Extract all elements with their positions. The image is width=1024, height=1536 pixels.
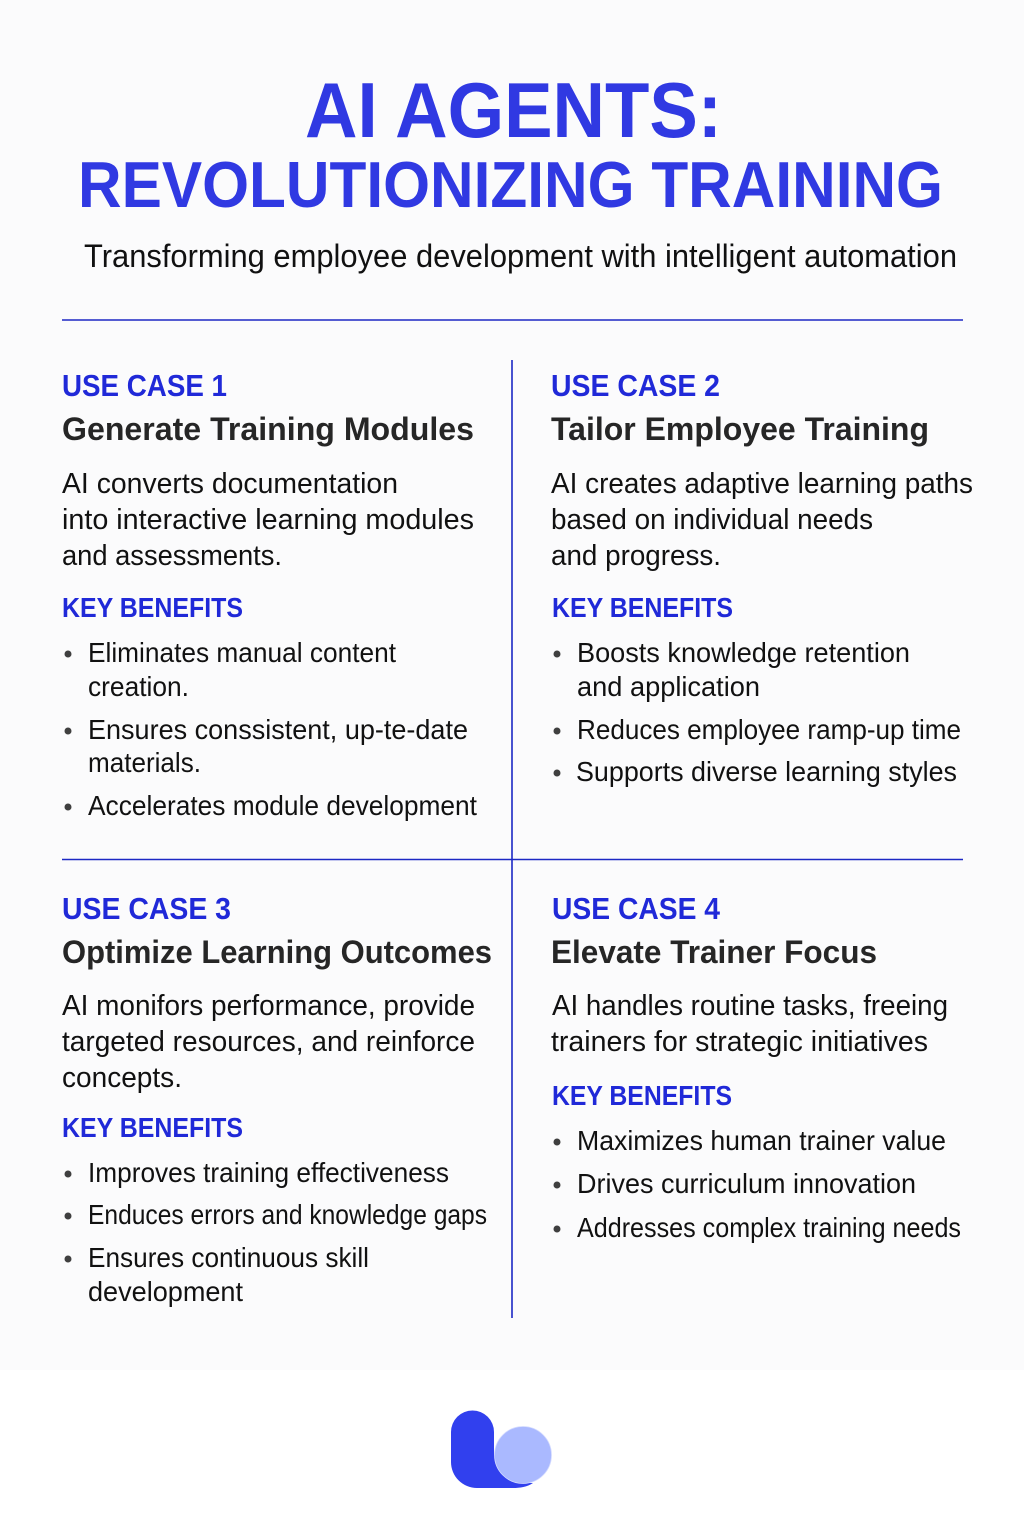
use case 4 description: trainers for strategic initiatives [551,1026,928,1058]
use case 1 benefits list: Ensures conssistent, up-te-date [88,714,468,745]
use case 2 benefits list: Boosts knowledge retention [577,637,910,668]
use case 3 label: USE CASE 3 [62,891,231,926]
use case 4 description: AI handles routine tasks, freeing [552,990,948,1022]
use case 3 description: targeted resources, and reinforce [62,1026,475,1058]
use case 2 benefits list [554,637,961,787]
use case 2 description: and progress. [551,540,721,572]
use case 3 key benefits heading: KEY BENEFITS [62,1112,243,1143]
header [78,66,957,274]
use case 3 heading: Optimize Learning Outcomes [62,934,492,970]
use case 2 key benefits heading: KEY BENEFITS [552,592,733,623]
use case 4 benefits list: Addresses complex training needs [577,1212,961,1243]
title line 1: AI AGENTS: [305,66,722,154]
use case 2 description [551,468,973,572]
use case 4 label: USE CASE 4 [552,891,721,926]
use case 1 description: AI converts documentation [62,468,398,500]
use case 1 description [62,468,474,572]
use case 3 description: concepts. [62,1062,182,1094]
use case 2 description: based on individual needs [551,504,873,536]
use case 4 description [551,990,948,1058]
use case 1 benefits list: creation. [88,671,189,702]
subtitle: Transforming employee development with intelligent automation [84,238,957,274]
panel: use case 4 [551,891,961,1243]
use case 1 benefits list [64,637,477,821]
use case 1 benefits list: Eliminates manual content [88,637,396,668]
use case 1 benefits list: Accelerates module development [88,790,477,821]
panel: use case 3 [62,891,492,1307]
use case 2 benefits list: Supports diverse learning styles [576,756,957,787]
use case 3 benefits list: Improves training effectiveness [88,1157,449,1188]
use case 3 benefits list: Ensures continuous skill [88,1242,369,1273]
use case 4 benefits list: Maximizes human trainer value [577,1125,946,1156]
use case 3 benefits list: development [88,1276,243,1307]
use case 3 description [62,990,475,1094]
use case 4 heading: Elevate Trainer Focus [551,934,877,970]
use case 3 benefits list: Enduces errors and knowledge gaps [88,1199,487,1230]
use case 1 description: and assessments. [62,540,282,572]
use case 4 key benefits heading: KEY BENEFITS [552,1080,732,1111]
use case 3 benefits list [64,1157,487,1307]
use case 1 benefits list: materials. [88,747,201,778]
use case 2 heading: Tailor Employee Training [551,411,929,447]
use case 4 benefits list: Drives curriculum innovation [577,1168,916,1199]
use case 2 description: AI creates adaptive learning paths [551,468,973,500]
use case 2 benefits list: Reduces employee ramp-up time [577,714,961,745]
use case 2 label: USE CASE 2 [551,368,720,403]
use case 2 benefits list: and application [577,671,760,702]
use case 4 benefits list [554,1125,961,1243]
use case 1 key benefits heading: KEY BENEFITS [62,592,243,623]
use case 1 label: USE CASE 1 [62,368,227,403]
panel: use case 2 [551,368,973,787]
panel: use case 1 [62,368,477,821]
title line 2: REVOLUTIONIZING TRAINING [78,148,943,221]
use case 3 description: AI monifors performance, provide [62,990,475,1022]
icon: logo [451,1410,552,1488]
use case 1 description: into interactive learning modules [62,504,474,536]
use case 1 heading: Generate Training Modules [62,411,474,447]
